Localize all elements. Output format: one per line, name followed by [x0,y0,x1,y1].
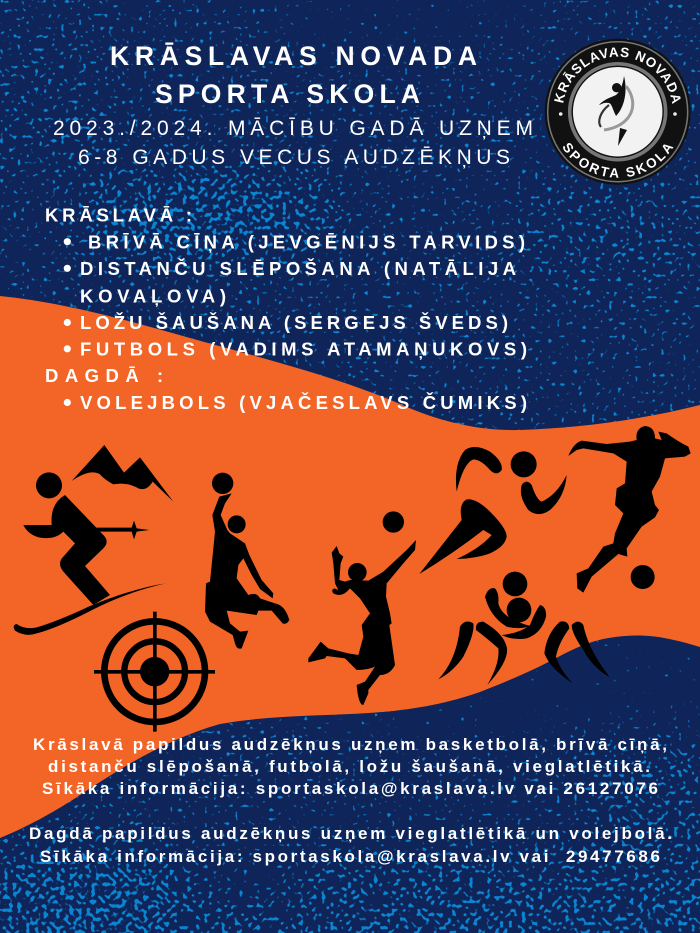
icon: skier [14,472,166,635]
subtitle: 2023./2024. MĀCĪBU GADĀ UZŅEM [53,117,533,140]
logo badge: KRĀSLAVAS NOVADA [554,48,681,104]
list: Krāslavā [45,204,527,360]
title [110,41,477,109]
list: Krāslavā: KOVAĻOVA) [80,286,226,306]
title: SPORTA SKOLA [155,79,420,109]
list: Krāslavā: KRĀSLAVĀ : [45,204,192,226]
icon: volleyball [383,511,404,533]
list: Dagdā: VOLEJBOLS (VJAČESLAVS ČUMIKS) [80,392,527,413]
icon: shooting target [94,612,215,732]
info text: Krāslavā: distanču slēpošanā, futbolā, ložu šaušanā, vieglatlētikā. [48,757,650,776]
info text: Krāslavā: Krāslavā papildus audzēkņus uzņem basketbolā, brīvā cīņā, [33,735,667,754]
orange wave band [0,296,700,838]
title: KRĀSLAVAS NOVADA [110,41,477,71]
icon: football player [568,426,691,593]
logo badge: SPORTA SKOLA [563,143,674,178]
list: Krāslavā: LOŽU ŠAUŠANA (SERGEJS ŠVEDS) [80,312,508,333]
info text: Krāslavā [33,735,667,798]
list: Krāslavā: DISTANČU SLĒPOŠANA (NATĀLIJA [80,258,516,279]
sport silhouettes: left group [14,445,215,732]
list: Dagdā: DAGDĀ : [45,365,163,386]
info text: Krāslavā: Sīkāka informācija: sportaskola@kraslava.lv vai 26127076 [42,779,658,798]
list: Dagdā [45,365,527,413]
subtitle [53,117,533,169]
logo badge [544,38,691,185]
info text: Dagdā: Dagdā papildus audzēkņus uzņem vieglatlētikā un volejbolā. [29,824,672,843]
sport silhouettes: right group [383,426,691,685]
list: Krāslavā: BRĪVĀ CĪŅA (JEVGĒNIJS TARVIDS) [88,232,525,252]
icon: mountains [72,445,173,502]
icon: basketball player [205,473,289,649]
icon: runner [419,447,567,574]
subtitle: 6-8 GADUS VECUS AUDZĒKŅUS [78,146,510,169]
icon: volleyball player [308,540,416,705]
info text: Dagdā [29,824,672,866]
info text: Dagdā: Sīkāka informācija: sportaskola@kraslava.lv vai 29477686 [40,847,660,866]
list: Krāslavā: FUTBOLS (VADIMS ATAMAŅUKOVS) [80,338,527,360]
icon: wrestlers [438,572,610,685]
